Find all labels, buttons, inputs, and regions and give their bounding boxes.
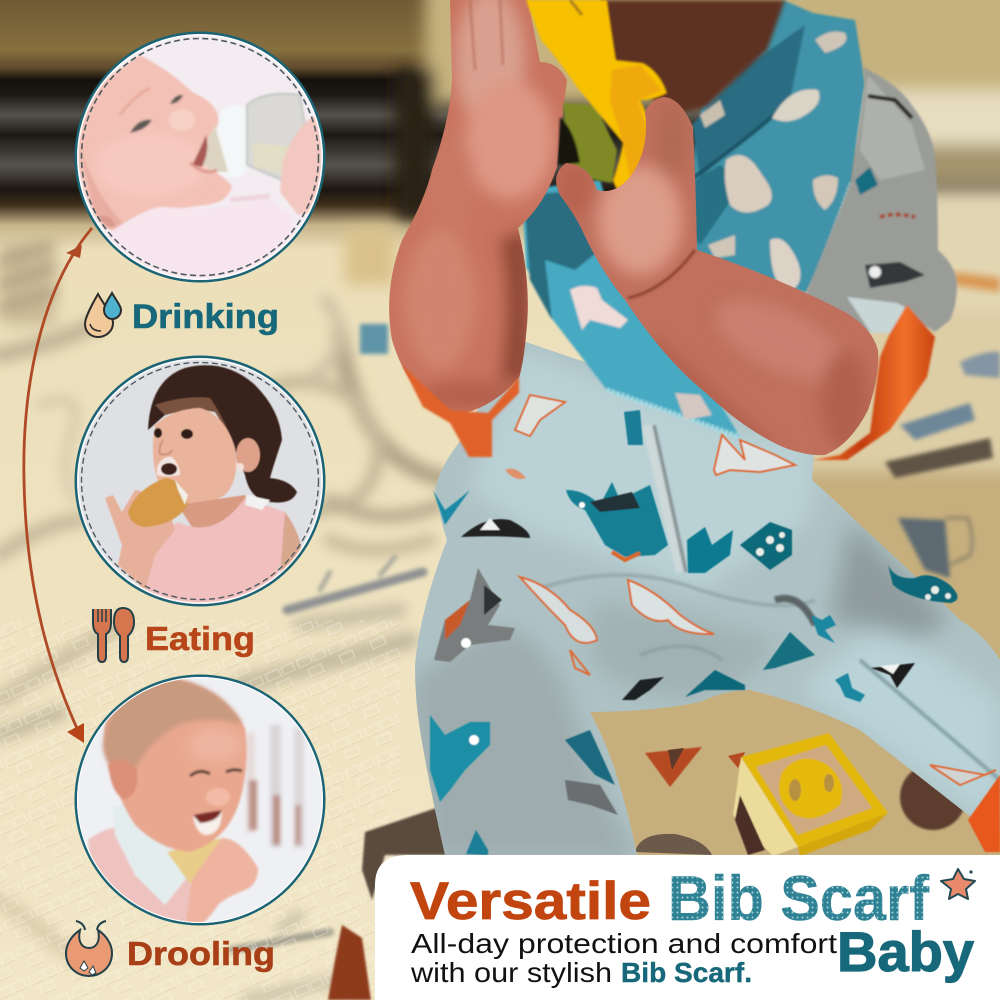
onesie dinosaur prints (430, 395, 1000, 855)
photo circle: eating (70, 355, 330, 615)
right hand and forearm (550, 90, 890, 460)
label: drooling (66, 921, 275, 976)
baby neck and chin shadow (600, 0, 785, 115)
baby onesie body (400, 330, 1000, 860)
icon: fork and spoon (93, 608, 134, 662)
left arm and hand (389, 0, 567, 412)
photo circle: drinking (70, 30, 330, 290)
heading: Bib Scarf: Bib Scarf (668, 864, 930, 934)
photo circle: drooling (70, 670, 330, 935)
mat road markings (0, 245, 450, 1000)
label: eating (93, 608, 255, 662)
play mat toys: cone, wooden block and scattered pieces (328, 733, 966, 1000)
label: drinking (85, 293, 279, 337)
orange mat streak (950, 272, 1000, 292)
label: drooling: Drooling (127, 935, 275, 972)
tagline: with our stylish (410, 957, 612, 988)
icon: baby bib with drops (66, 921, 112, 976)
tagline: All-day protection and comfort (411, 928, 837, 959)
icon: water drops (85, 293, 121, 337)
icon: star (941, 869, 975, 899)
grey sleeve with orange cuff (806, 67, 957, 460)
label: drinking: Drinking (132, 298, 279, 336)
panel: white headline card (375, 855, 1000, 1000)
timeline arrow linking the three uses (24, 228, 92, 743)
left sleeve cuff (402, 365, 519, 457)
logo: Baby: Baby (837, 920, 974, 983)
label: eating: Eating (145, 620, 255, 657)
patterned teal bib scarf with polar bears (522, 0, 865, 437)
heading: Versatile: Versatile (410, 872, 651, 931)
teether toy (526, 0, 667, 193)
tagline emphasis: Bib Scarf. (621, 957, 752, 988)
